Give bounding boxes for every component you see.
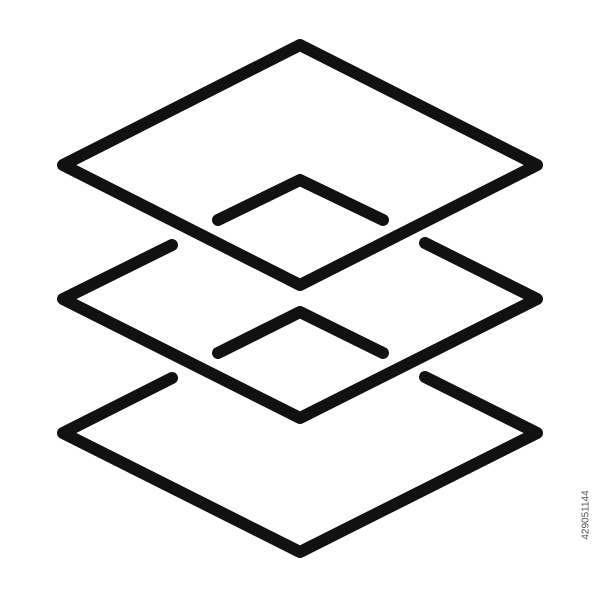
stock id text: 429051144 — [580, 490, 592, 540]
top layer diamond — [63, 45, 537, 285]
bottom layer — [63, 377, 537, 552]
middle layer — [63, 243, 537, 418]
